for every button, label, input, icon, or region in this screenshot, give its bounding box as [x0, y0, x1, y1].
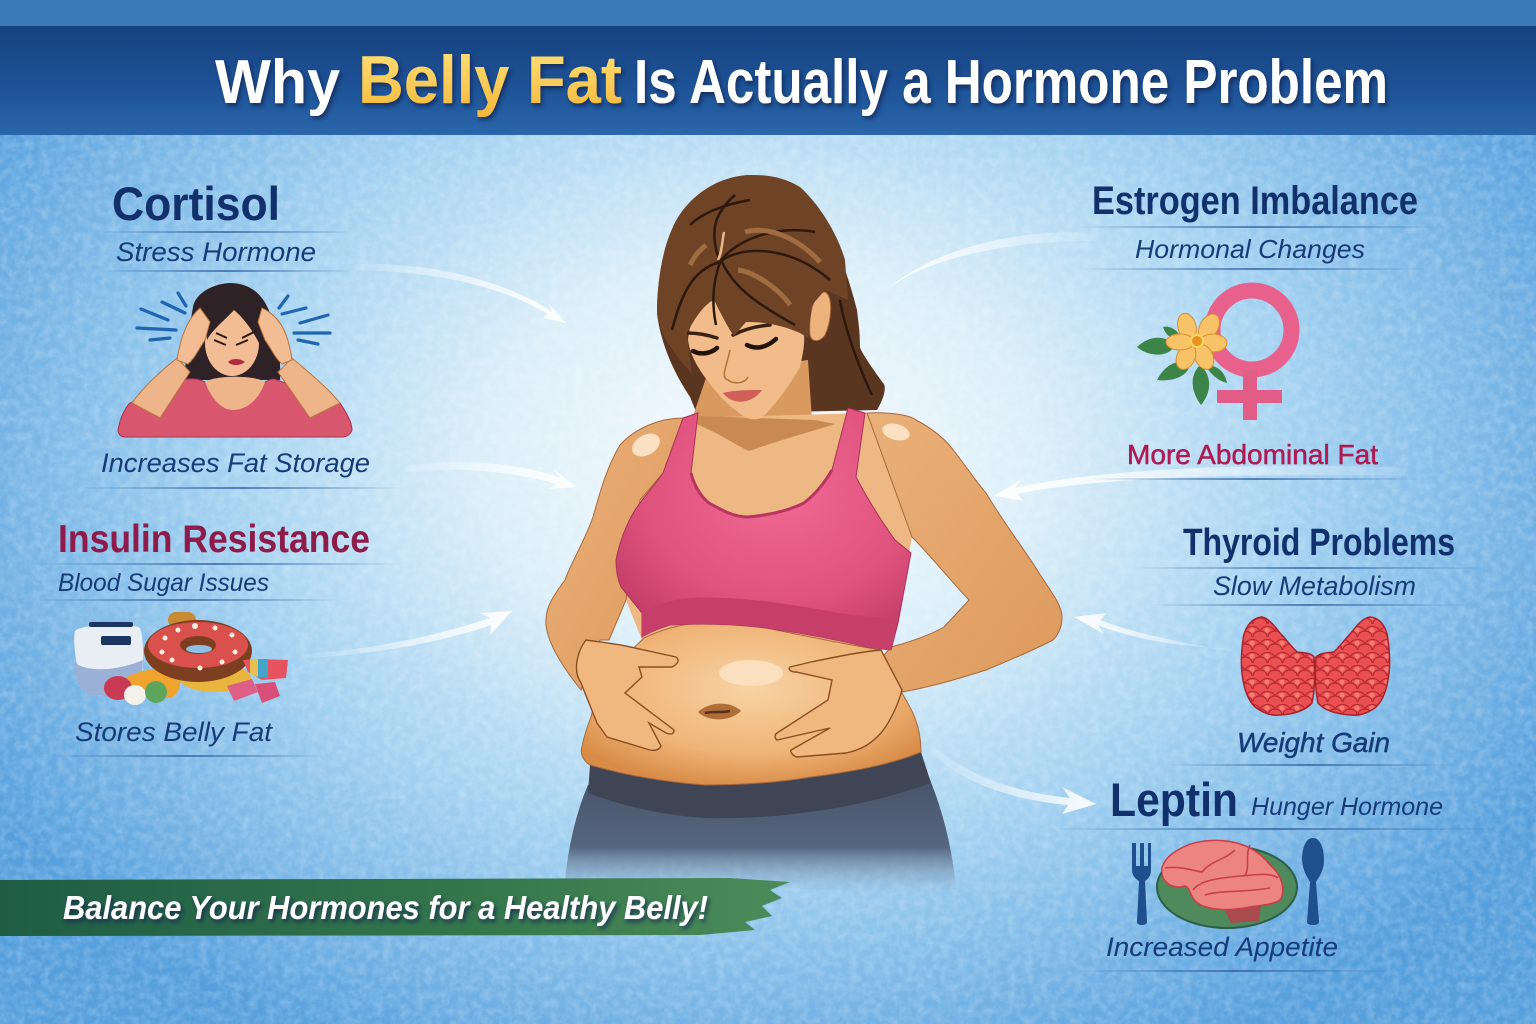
- right arm: [867, 413, 1062, 692]
- title: Belly Fat: [358, 42, 622, 118]
- callout banner: [0, 878, 790, 936]
- icon: brain on plate with cutlery: [1132, 838, 1324, 928]
- icon: female symbol with flower: [1137, 290, 1292, 420]
- heading: leptin: Leptin: [1110, 773, 1238, 826]
- navel: [698, 704, 741, 719]
- neck: [690, 360, 812, 425]
- caption: increased appetite: Increased Appetite: [1106, 932, 1338, 962]
- heading: cortisol: Cortisol: [112, 177, 280, 230]
- panel: estrogen imbalance: [1075, 179, 1445, 480]
- subtitle: stress hormone: Stress Hormone: [116, 237, 316, 267]
- panel: insulin resistance: [30, 518, 400, 757]
- arrows: [305, 232, 1405, 814]
- subtitle: hormonal changes: Hormonal Changes: [1135, 234, 1365, 264]
- subtitle: hunger hormone: Hunger Hormone: [1251, 793, 1443, 821]
- belly: [581, 623, 921, 785]
- heading: insulin resistance: Insulin Resistance: [58, 518, 370, 561]
- face: [688, 280, 804, 419]
- left hand: [577, 640, 678, 750]
- heading: estrogen imbalance: Estrogen Imbalance: [1092, 179, 1418, 223]
- caption: increases fat storage: Increases Fat Storage: [101, 448, 370, 478]
- callout text: Balance Your Hormones for a Healthy Belly!: [63, 889, 708, 926]
- title: Is Actually a Hormone Problem: [634, 48, 1388, 117]
- hair back: [657, 175, 885, 414]
- caption: more abdominal fat: More Abdominal Fat: [1127, 439, 1378, 470]
- right hand: [775, 650, 902, 757]
- pink top: [616, 408, 911, 650]
- subtitle: slow metabolism: Slow Metabolism: [1213, 571, 1416, 601]
- icon: thyroid gland: [1241, 617, 1390, 715]
- torso: [626, 413, 916, 650]
- waistband: [588, 752, 931, 818]
- heading: thyroid problems: Thyroid Problems: [1183, 522, 1455, 564]
- icon: sugary foods: [74, 612, 288, 705]
- shoulder highlights: [628, 429, 664, 461]
- closed eyes and brows: [693, 339, 776, 353]
- nose and lips: [724, 350, 748, 383]
- ear: [810, 292, 831, 341]
- title: [215, 42, 1388, 118]
- pants: [565, 775, 957, 895]
- hair front: [657, 175, 848, 374]
- central woman illustration: [546, 175, 1062, 895]
- caption: weight gain: Weight Gain: [1237, 727, 1390, 758]
- icon: stressed woman: [118, 283, 352, 437]
- panel: cortisol: [75, 177, 405, 489]
- panel: thyroid problems: [1135, 522, 1485, 766]
- title banner: [0, 26, 1536, 135]
- title: Why: [215, 48, 340, 117]
- left arm: [546, 418, 683, 690]
- caption: stores belly fat: Stores Belly Fat: [75, 717, 274, 747]
- subtitle: blood sugar issues: Blood Sugar Issues: [58, 569, 269, 597]
- panel: leptin: [1050, 773, 1500, 972]
